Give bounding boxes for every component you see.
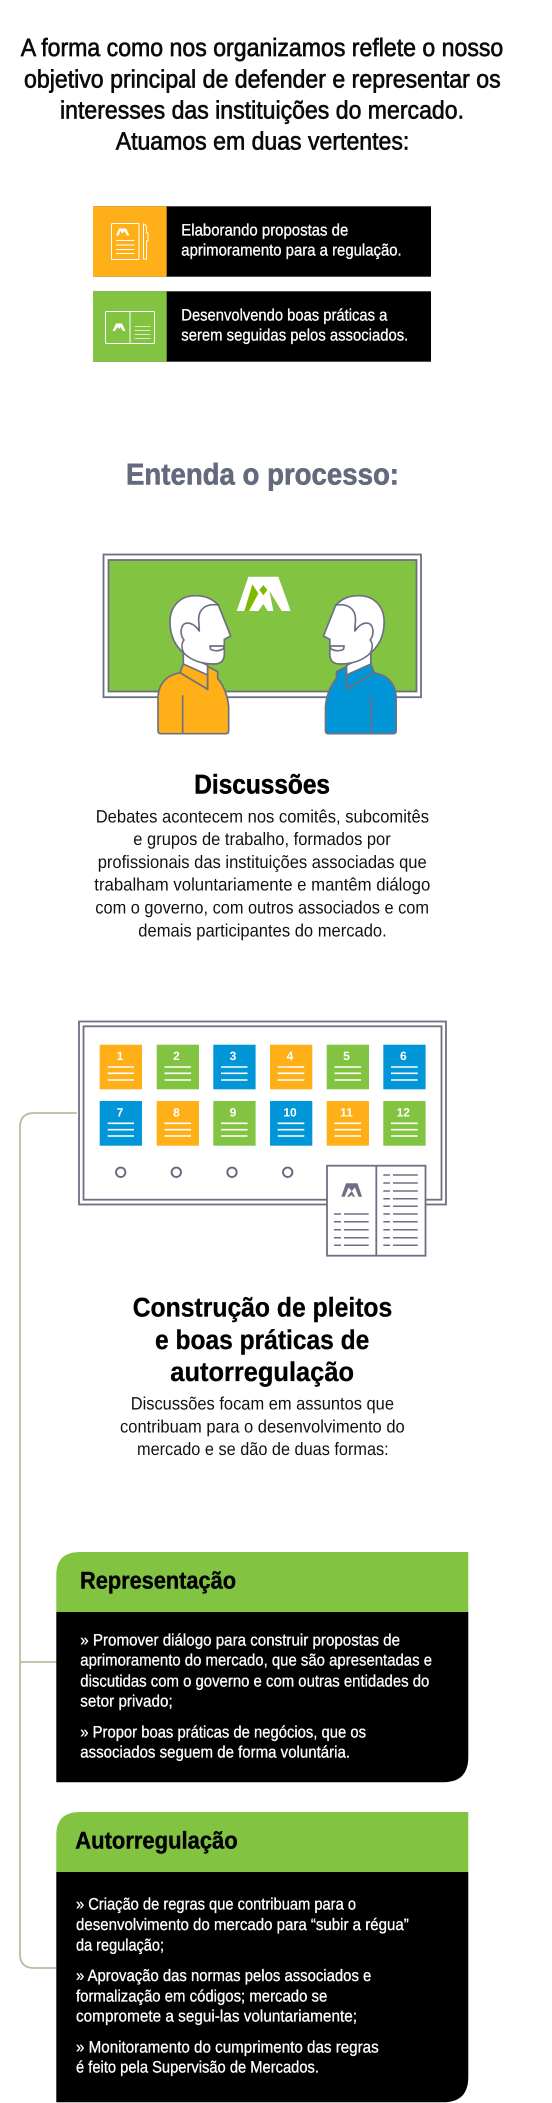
cards row 2: 11 <box>340 1105 353 1119</box>
text block: representation items: aprimoramento do mercado, que são apresentadas e <box>80 1652 432 1670</box>
icon: open book <box>106 312 154 344</box>
text block: two forms description: Discussões focam em assuntos que <box>131 1393 394 1413</box>
text: elaborating proposals: aprimoramento para a regulação. <box>181 242 402 260</box>
text: developing good practices: serem seguidas pelos associados. <box>181 327 408 345</box>
heading: discussions: Discussões <box>194 770 330 800</box>
title: intro statement: interesses das instituições do mercado. <box>60 96 464 124</box>
text block: representation items: discutidas com o governo e com outras entidades do <box>80 1672 429 1690</box>
text block: discussions description: com o governo, com outros associados e com <box>95 898 429 918</box>
heading: self-regulation: Autorregulação <box>75 1828 238 1855</box>
text block: discussions description: trabalham voluntariamente e mantêm diálogo <box>94 875 430 895</box>
text block: self-regulation items: compromete a segui-las voluntariamente; <box>76 2008 357 2026</box>
text block: representation items: » Propor boas práticas de negócios, que os <box>80 1723 366 1741</box>
text: developing good practices: Desenvolvendo boas práticas a <box>181 306 388 324</box>
heading: understand the process: Entenda o processo: <box>126 458 399 491</box>
text block: two forms description <box>120 1393 405 1459</box>
cards row 2: 8 <box>173 1105 180 1119</box>
illustration: board with twelve cards and book <box>79 1022 446 1256</box>
circles <box>116 1168 292 1177</box>
heading: representation: Representação <box>80 1568 236 1595</box>
title: intro statement: Atuamos em duas vertentes: <box>116 127 409 155</box>
cards row 1: 5 <box>343 1049 350 1063</box>
heading: building claims and self-regulation: autorregulação <box>170 1357 354 1387</box>
text: elaborating proposals <box>181 221 402 260</box>
text block: self-regulation items <box>76 1896 409 2077</box>
heading: building claims and self-regulation: e boas práticas de <box>155 1325 369 1355</box>
person: right, blue shirt <box>323 596 396 734</box>
text block: representation items <box>80 1631 432 1762</box>
panel: self-regulation <box>56 1812 468 2102</box>
text block: representation items: associados seguem de forma voluntária. <box>80 1744 350 1762</box>
title: intro statement <box>21 34 503 155</box>
text block: self-regulation items: » Monitoramento do cumprimento das regras <box>76 2038 379 2056</box>
text block: self-regulation items: » Criação de regras que contribuam para o <box>76 1896 356 1914</box>
icon: open code book <box>327 1166 426 1256</box>
text block: self-regulation items: desenvolvimento do mercado para “subir a régua” <box>76 1916 409 1934</box>
cards row 1: 4 <box>287 1049 294 1063</box>
text: developing good practices <box>181 306 408 345</box>
cards row 2: 7 <box>117 1105 124 1119</box>
panel: developing good practices <box>93 291 431 362</box>
panel: representation <box>56 1552 468 1782</box>
cards row 1 <box>100 1045 426 1089</box>
text block: two forms description: mercado e se dão de duas formas: <box>137 1439 389 1459</box>
text block: discussions description: demais participantes do mercado. <box>138 920 387 940</box>
icon: document and pen <box>112 224 148 260</box>
board <box>104 554 421 697</box>
heading: building claims and self-regulation: Construção de pleitos <box>133 1293 392 1323</box>
text block: self-regulation items: » Aprovação das normas pelos associados e <box>76 1967 371 1985</box>
text block: self-regulation items: formalização em códigos; mercado se <box>76 1987 327 2005</box>
title: intro statement: A forma como nos organizamos reflete o nosso <box>21 34 503 62</box>
text block: self-regulation items: da regulação; <box>76 1937 164 1955</box>
text block: representation items: setor privado; <box>80 1693 173 1711</box>
icon: logo on board <box>237 577 291 611</box>
text block: discussions description: Debates acontecem nos comitês, subcomitês <box>96 806 429 826</box>
text: elaborating proposals: Elaborando propostas de <box>181 221 348 239</box>
heading: building claims and self-regulation <box>133 1293 392 1387</box>
cards row 2: 12 <box>397 1105 410 1119</box>
text block: discussions description: e grupos de trabalho, formados por <box>133 829 391 849</box>
cards row 1: 3 <box>230 1049 237 1063</box>
text block: discussions description <box>94 806 430 940</box>
panel: elaborating proposals <box>93 206 431 277</box>
cards row 1: 6 <box>400 1049 407 1063</box>
text block: discussions description: profissionais das instituições associadas que <box>98 852 427 872</box>
text block: representation items: » Promover diálogo para construir propostas de <box>80 1631 400 1649</box>
text block: two forms description: contribuam para o desenvolvimento do <box>120 1416 405 1436</box>
board frame <box>79 1022 446 1204</box>
cards row 1: 2 <box>173 1049 180 1063</box>
cards row 2: 10 <box>283 1105 297 1119</box>
cards row 2 <box>100 1101 426 1146</box>
cards row 2: 9 <box>230 1105 237 1119</box>
title: intro statement: objetivo principal de defender e representar os <box>24 65 501 93</box>
person: left, orange shirt <box>158 596 231 734</box>
text block: self-regulation items: é feito pela Supervisão de Mercados. <box>76 2059 319 2077</box>
connector line: process timeline <box>20 1113 77 1968</box>
illustration: two people in front of green board <box>104 554 421 734</box>
cards row 1: 1 <box>117 1049 124 1063</box>
